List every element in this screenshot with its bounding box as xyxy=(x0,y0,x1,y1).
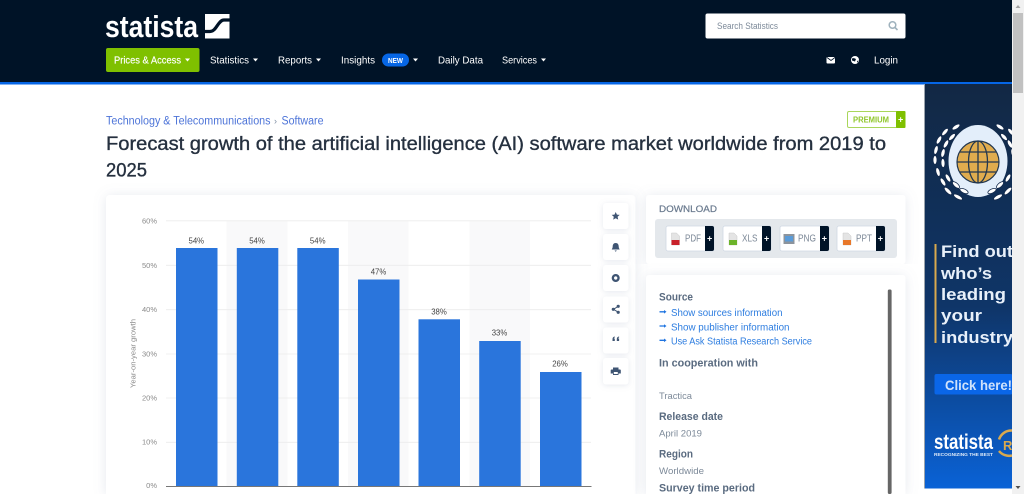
region: Region xyxy=(659,448,693,460)
ad headline: industry xyxy=(941,328,1014,347)
PPT button xyxy=(837,226,885,251)
navigation links xyxy=(210,54,546,66)
bar value labels xyxy=(188,236,568,368)
header bar xyxy=(0,0,1012,84)
premium badge: + xyxy=(898,114,903,124)
bar value labels: 38% xyxy=(431,308,447,316)
ad headline: who’s xyxy=(940,264,992,283)
panel scrollbar xyxy=(888,290,892,494)
title xyxy=(106,133,886,182)
search box: Search Statistics xyxy=(717,21,778,31)
navigation links: NEW xyxy=(388,56,404,65)
search box xyxy=(706,14,906,38)
region xyxy=(659,448,704,477)
browser scrollbar xyxy=(1012,0,1024,494)
cooperation: In cooperation with xyxy=(659,358,758,370)
bar value labels: 54% xyxy=(188,236,204,246)
y axis labels: 10% xyxy=(142,438,157,446)
icon: share xyxy=(614,306,618,312)
y axis labels: 60% xyxy=(142,216,157,226)
ad button xyxy=(934,374,1012,394)
release date: April 2019 xyxy=(659,428,702,440)
XLS button: + xyxy=(764,234,769,244)
source links: Use Ask Statista Research Service xyxy=(671,336,812,348)
chart tool buttons xyxy=(603,203,628,384)
panel: chart card xyxy=(106,195,636,494)
bar value labels: 33% xyxy=(492,328,507,338)
ad logo: statista xyxy=(934,431,993,454)
ad logo: RECOGNIZING THE BEST xyxy=(934,452,993,457)
breadcrumb: Technology & Telecommunications xyxy=(106,116,271,128)
icon: star xyxy=(612,212,620,220)
title: 2025 xyxy=(106,160,147,182)
PNG button: + xyxy=(822,234,827,244)
navigation links: Statistics xyxy=(210,54,249,66)
ad button: Click here! xyxy=(945,377,1012,393)
ad headline: leading xyxy=(941,285,1006,304)
y axis labels: 50% xyxy=(142,261,157,270)
release date xyxy=(659,411,723,440)
XLS button: XLS xyxy=(742,234,758,244)
y axis labels xyxy=(142,216,157,490)
cooperation: Tractica xyxy=(659,391,693,402)
bar value labels: 54% xyxy=(249,236,265,246)
source links: Source xyxy=(659,292,693,304)
ad headline: Find out xyxy=(941,242,1013,261)
premium badge xyxy=(848,111,906,128)
premium badge: PREMIUM xyxy=(853,116,889,124)
breadcrumb: Software xyxy=(282,116,324,128)
account icons and login xyxy=(826,54,898,66)
bar chart xyxy=(128,216,592,490)
cooperation xyxy=(659,358,758,402)
navigation links: Services xyxy=(502,54,537,66)
ad headline xyxy=(934,242,1014,347)
breadcrumb: › xyxy=(274,116,277,126)
icon: printer xyxy=(611,368,621,375)
statista logo: statista xyxy=(105,9,199,44)
release date: Release date xyxy=(659,411,723,423)
XLS button xyxy=(723,226,771,251)
PDF button: + xyxy=(707,234,712,244)
ad banner xyxy=(924,84,1016,488)
bar value labels: 54% xyxy=(310,236,326,246)
y axis labels: 30% xyxy=(142,350,157,358)
source links xyxy=(659,292,812,348)
icon: laurel globe xyxy=(933,123,1016,201)
PPT button: + xyxy=(878,234,883,244)
region: Worldwide xyxy=(659,466,704,477)
icon: quote xyxy=(612,336,619,341)
source links: Show sources information xyxy=(671,308,782,319)
bars xyxy=(176,248,582,486)
account icons and login: Login xyxy=(874,54,898,66)
navigation links: Daily Data xyxy=(438,54,483,66)
navigation: Prices & Access button: Prices & Access xyxy=(114,54,181,66)
PDF button xyxy=(666,226,714,251)
y axis title: Year-on-year growth xyxy=(128,319,138,388)
ad headline: your xyxy=(941,306,982,325)
icon: gear xyxy=(612,274,620,282)
ad logo: R xyxy=(1003,438,1013,453)
y axis labels: 0% xyxy=(146,481,157,490)
PDF button: PDF xyxy=(685,234,701,244)
navigation links: Insights xyxy=(341,54,375,66)
panel: download xyxy=(646,195,906,264)
y axis labels: 40% xyxy=(142,305,157,314)
y axis labels: 20% xyxy=(142,394,157,402)
navigation links: Reports xyxy=(278,54,312,66)
bar value labels: 47% xyxy=(371,268,386,276)
source links: Show publisher information xyxy=(671,322,790,334)
bar value labels: 26% xyxy=(552,360,568,368)
PNG button: PNG xyxy=(798,234,816,244)
title: Forecast growth of the artificial intelligence (AI) software market worldwide from 2019 to xyxy=(106,133,886,155)
panel: source information xyxy=(646,275,906,494)
icon: bell xyxy=(612,243,620,252)
navigation: Prices & Access button xyxy=(106,48,200,72)
panel: download: DOWNLOAD xyxy=(659,204,717,214)
PPT button: PPT xyxy=(856,234,872,244)
PNG button xyxy=(780,226,829,251)
